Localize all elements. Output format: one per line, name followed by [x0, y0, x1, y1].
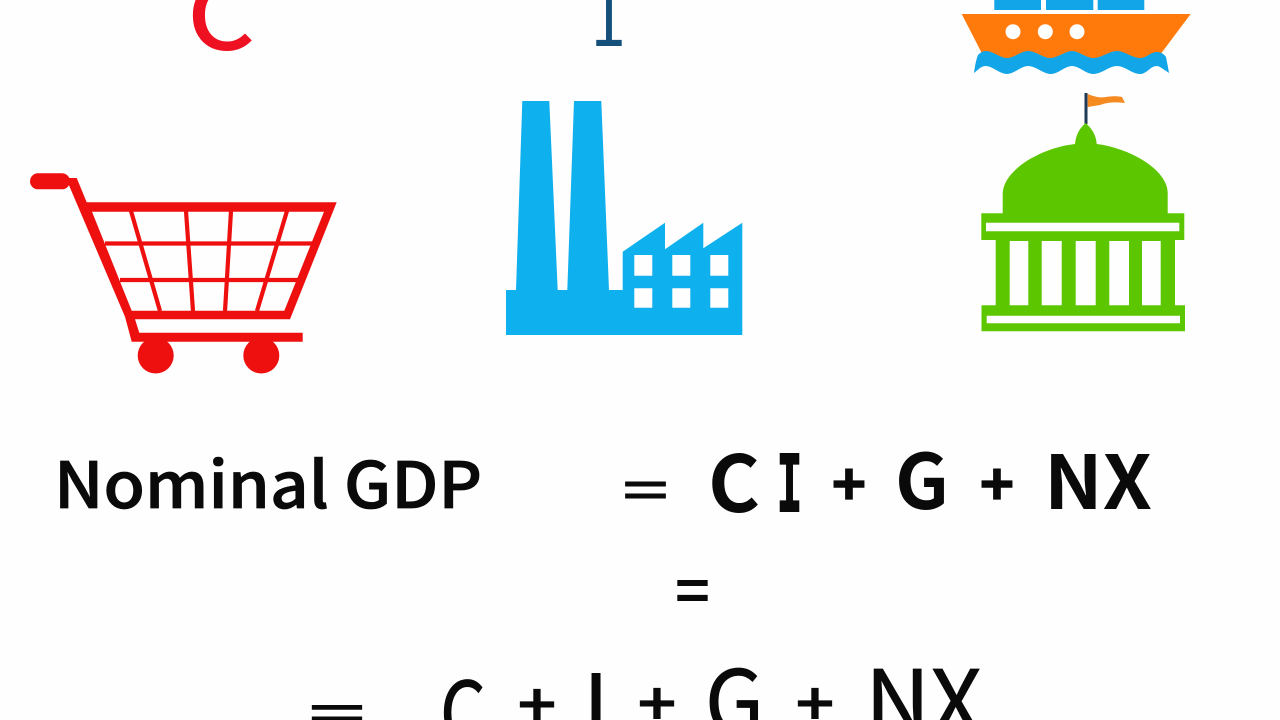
flag pole — [1084, 93, 1088, 124]
equals sign: = — [622, 452, 669, 522]
flag — [1088, 94, 1125, 107]
containers — [994, 0, 1144, 10]
dome — [1003, 123, 1168, 214]
equation: first line — [622, 421, 1152, 537]
heading: Nominal GDP: Nominal GDP — [54, 435, 482, 527]
icon: government building — [981, 93, 1185, 331]
hull — [962, 14, 1191, 60]
basket grid — [105, 211, 313, 311]
equation: bottom line (clipped) — [308, 631, 982, 720]
cart handle — [30, 173, 70, 189]
icon: cargo ship — [962, 0, 1191, 74]
plus: + — [980, 441, 1014, 522]
plus: + — [832, 441, 866, 522]
icon: factory — [506, 101, 742, 335]
middle equals sign: = — [675, 545, 710, 629]
water waves — [974, 51, 1169, 74]
wheels — [138, 338, 279, 374]
letters NX: NX — [1044, 424, 1152, 531]
letter C: C — [708, 423, 760, 535]
cart basket and frame — [68, 178, 337, 342]
icon: shopping cart — [30, 173, 337, 374]
equation: first line: I — [777, 439, 802, 537]
letter G: G — [895, 421, 949, 531]
columns and base — [981, 213, 1185, 331]
